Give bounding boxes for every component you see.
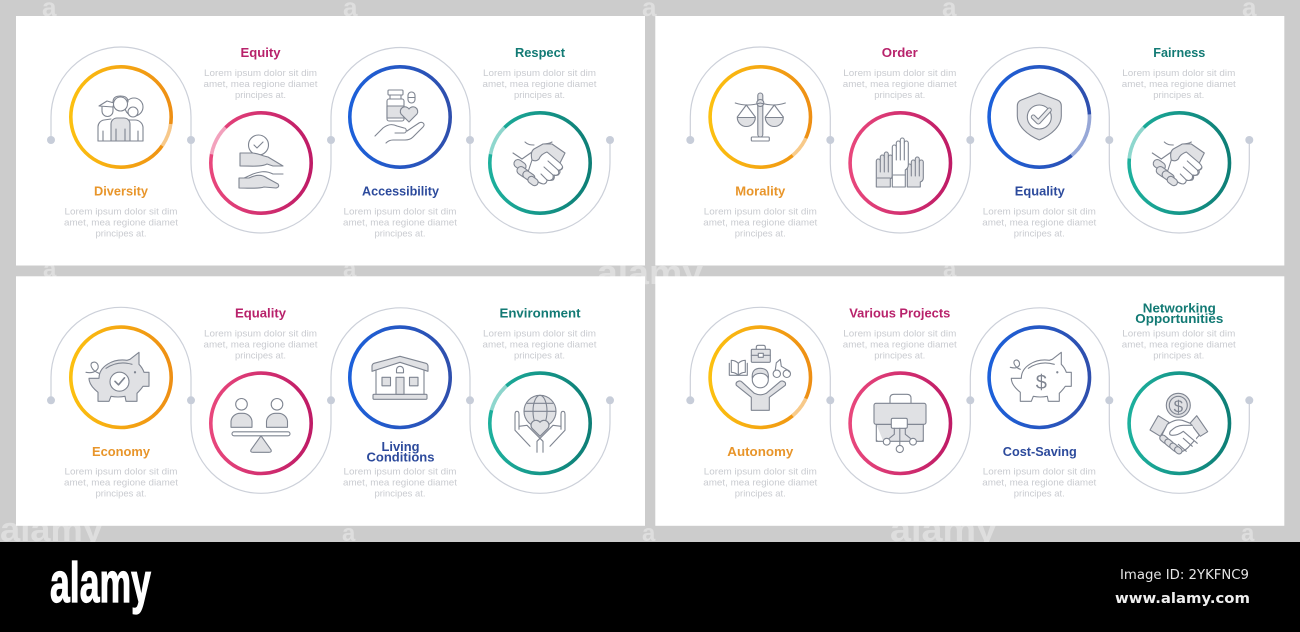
description: principes at. [735,228,786,239]
icon: handshake [512,142,565,187]
description [482,328,597,361]
description [1122,68,1236,101]
description [843,328,957,361]
title: Diversity [94,184,149,199]
icon: piggy bank with check [86,352,149,401]
description: amet, mea regione diamet [204,79,318,90]
icon: raised hands [876,138,923,187]
title: Various Projects [849,305,950,320]
watermark marks: a [43,256,57,283]
step: Autonomy [703,327,818,500]
description: Lorem ipsum dolor sit dim [983,467,1096,478]
description: Lorem ipsum dolor sit dim [204,68,317,79]
title: Respect [515,45,566,60]
panel: Economy, Equality, Living Conditions, Environment [16,276,645,526]
description: amet, mea regione diamet [843,79,957,90]
icon: briefcase with network nodes [874,394,926,453]
description: amet, mea regione diamet [482,79,597,90]
connector line [686,307,1253,493]
description [1122,328,1236,361]
icon: handshake with coin: $ [1174,397,1184,416]
title: Equality [1015,184,1066,199]
connector line [686,47,1253,233]
description: amet, mea regione diamet [482,339,597,350]
description: amet, mea regione diamet [343,478,457,489]
title: Living [382,439,420,454]
description: principes at. [874,350,925,361]
description: amet, mea regione diamet [64,478,178,489]
description: principes at. [1153,90,1204,101]
description: Lorem ipsum dolor sit dim [843,68,956,79]
description: principes at. [514,350,565,361]
icon: two people on seesaw [231,398,290,452]
description: principes at. [374,489,426,500]
description [982,467,1097,500]
description: principes at. [735,489,786,500]
title: Fairness [1153,45,1205,60]
title: Order [882,45,918,60]
title: Accessibility [362,184,440,199]
icon: house [372,356,428,399]
icon: hands with check [239,135,283,188]
panel: Diversity, Equity, Accessibility, Respect [16,16,645,266]
image id: Image ID: 2YKFNC9 [1120,567,1249,583]
title: Equality [235,305,287,320]
step: Living Conditions [343,327,457,500]
description: principes at. [514,90,565,101]
description: Lorem ipsum dolor sit dim [204,328,317,339]
description: principes at. [874,90,925,101]
step: Environment [482,305,597,474]
title: Autonomy [727,444,794,459]
description: amet, mea regione diamet [982,478,1097,489]
description: amet, mea regione diamet [703,478,818,489]
title: Equity [240,45,281,60]
description: amet, mea regione diamet [703,217,818,228]
description: Lorem ipsum dolor sit dim [704,467,817,478]
icon: piggy bank with dollar [1010,352,1071,401]
step: Cost-Saving [982,327,1097,500]
icon: balance scale [735,93,785,141]
watermark marks: alamy [890,511,997,549]
description: amet, mea regione diamet [64,217,178,228]
watermark marks: a [343,256,357,283]
description: Lorem ipsum dolor sit dim [344,467,457,478]
title: Cost-Saving [1003,444,1077,459]
description [703,467,818,500]
watermark marks: a [943,256,957,283]
description [64,467,178,500]
watermark marks: a [342,520,356,547]
description: principes at. [1014,489,1065,500]
step: Equity [204,45,318,213]
description: amet, mea regione diamet [343,217,457,228]
title: Networking [1143,300,1216,315]
footer bar [0,542,1300,632]
description: principes at. [374,228,426,239]
description [204,68,318,101]
description [343,206,457,239]
description: Lorem ipsum dolor sit dim [483,328,596,339]
description: amet, mea regione diamet [1122,339,1236,350]
description [204,328,318,361]
description: principes at. [235,350,286,361]
description: amet, mea regione diamet [1122,79,1236,90]
icon: globe and heart in hands [515,395,565,452]
title [366,439,434,464]
description: Lorem ipsum dolor sit dim [64,467,178,478]
title: Opportunities [1135,311,1223,326]
panel: Autonomy, Various Projects, Cost-Saving, Networking Opportunities [655,276,1284,526]
connector line [47,307,614,493]
description: principes at. [96,228,146,239]
watermark marks: alamy [0,511,103,549]
description: Lorem ipsum dolor sit dim [704,206,817,217]
connector line [47,47,614,233]
step: Order [843,45,957,213]
watermark marks: a [1241,520,1255,547]
icon: handshake with coin [1150,393,1208,455]
step: Diversity [64,67,178,239]
watermark marks: alamy [597,254,703,292]
description: Lorem ipsum dolor sit dim [344,206,457,217]
description: amet, mea regione diamet [204,339,318,350]
icon: handshake [1152,142,1204,187]
website: www.alamy.com [1115,591,1250,607]
icon: piggy bank with dollar: $ [1036,372,1047,394]
description: Lorem ipsum dolor sit dim [1122,68,1235,79]
title: Economy [92,444,151,459]
icon: shield with check [1017,93,1061,140]
description: Lorem ipsum dolor sit dim [483,68,596,79]
description: Lorem ipsum dolor sit dim [843,328,956,339]
title: Conditions [366,449,434,464]
description: Lorem ipsum dolor sit dim [64,206,178,217]
description [343,467,457,500]
step: Equality [982,67,1097,239]
description: Lorem ipsum dolor sit dim [983,206,1096,217]
title: Environment [500,305,581,320]
icon: three people [98,96,143,141]
icon: medicine in hand [375,90,424,143]
step: Various Projects [843,305,957,474]
description: amet, mea regione diamet [982,217,1097,228]
step: Respect [482,45,597,213]
description: principes at. [1153,350,1204,361]
description: Lorem ipsum dolor sit dim [1122,328,1235,339]
description: principes at. [235,90,286,101]
description: principes at. [96,489,146,500]
description [64,206,178,239]
step: Economy [64,327,178,500]
description: amet, mea regione diamet [843,339,957,350]
description [843,68,957,101]
title: Morality [735,184,786,199]
step: Networking Opportunities [1122,300,1236,474]
description [482,68,597,101]
description [703,206,818,239]
step: Morality [703,67,818,239]
title [1135,300,1223,326]
step: Fairness [1122,45,1236,213]
step: Equality [204,305,318,474]
description [982,206,1097,239]
panel: Morality, Order, Equality, Fairness [655,16,1284,266]
description: principes at. [1014,228,1065,239]
logo: alamy [50,551,151,615]
watermark marks: a [642,520,656,547]
step: Accessibility [343,67,457,239]
icon: person with briefcase, book and skate [729,345,790,410]
